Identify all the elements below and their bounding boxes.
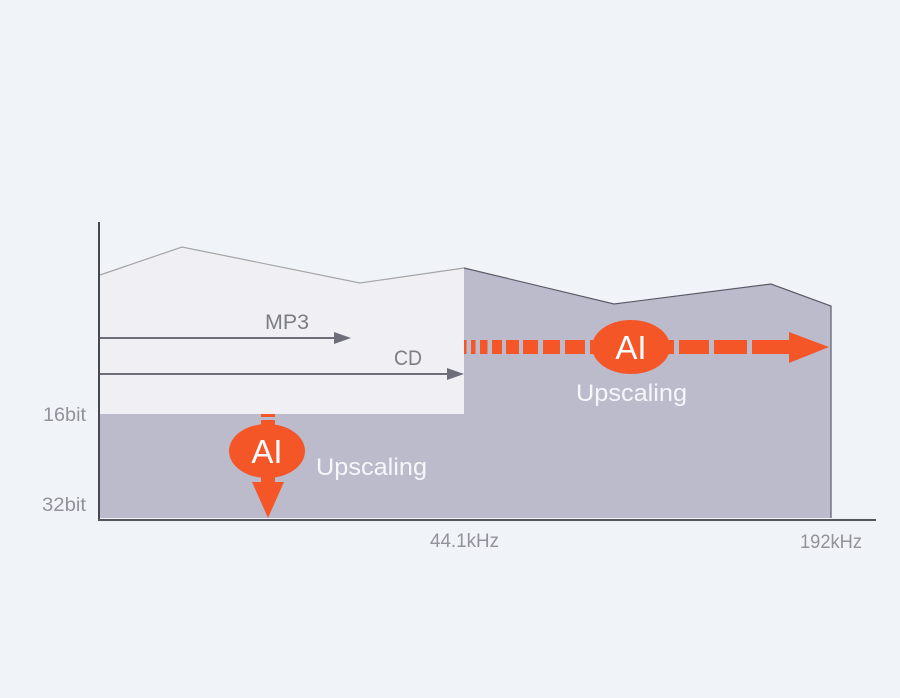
vertical AI upscaling arrow [229, 414, 305, 518]
dashed shaft segments [464, 340, 747, 354]
AI ellipse [229, 424, 305, 478]
label: 192kHz: 192kHz [800, 532, 862, 553]
original area: CD quality region [100, 247, 464, 414]
horizontal AI upscaling arrow [464, 320, 829, 374]
shaft top [261, 420, 275, 428]
label: 44.1kHz: 44.1kHz [430, 531, 499, 552]
arrow head [252, 482, 284, 518]
label: MP3: MP3 [265, 311, 309, 334]
AI ellipse [592, 320, 670, 374]
label: Upscaling bottom: Upscaling [316, 454, 427, 481]
label: Upscaling right: Upscaling [576, 380, 687, 407]
x axis [98, 519, 876, 521]
y axis [98, 222, 100, 521]
label: 32bit: 32bit [42, 495, 87, 516]
arrow head [752, 332, 829, 363]
arrow: MP3 range [100, 332, 351, 344]
arrow: CD range [100, 368, 464, 380]
original area outline [100, 247, 464, 283]
label: CD: CD [394, 347, 422, 370]
upscaled area: high-resolution region [100, 268, 831, 518]
AI label: AI [615, 329, 647, 366]
shaft bottom [261, 476, 275, 484]
AI label: AI [251, 433, 283, 470]
dash top [261, 414, 275, 417]
label: 16bit: 16bit [43, 405, 87, 426]
upscaled area outline [464, 268, 831, 518]
